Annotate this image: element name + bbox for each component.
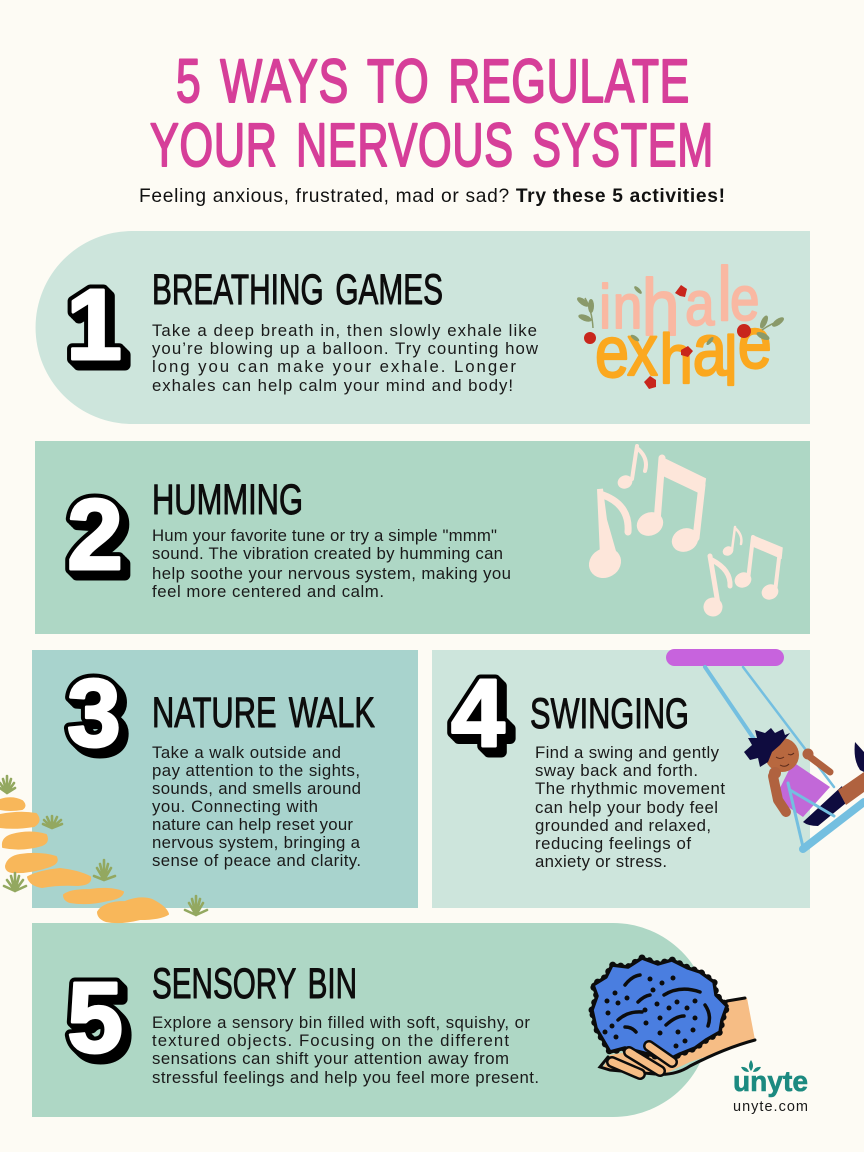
number 4: 4 (455, 664, 509, 771)
body text: you’re blowing up a balloon. Try counting how (152, 339, 539, 358)
logo: unyte (733, 1060, 808, 1115)
body text (152, 321, 539, 395)
body text: stressful feelings and help you feel more present. (152, 1068, 539, 1087)
number 1: 1 (72, 275, 128, 387)
number 2: 2 (67, 479, 123, 591)
body text: anxiety or stress. (535, 852, 667, 871)
number 4: 4 (457, 666, 511, 773)
body text: sensations can shift your attention away from (152, 1049, 509, 1068)
title: 5 WAYS TO REGULATE (176, 47, 690, 115)
body text: grounded and relaxed, (535, 816, 711, 835)
icon: hand holding sensory blob (592, 958, 755, 1076)
body text: Explore a sensory bin filled with soft, squishy, or (152, 1013, 530, 1032)
panel: 4 swinging (432, 650, 810, 908)
body text: Take a deep breath in, then slowly exhale like (152, 321, 537, 340)
body text: nervous system, bringing a (152, 833, 361, 852)
body text: reducing feelings of (535, 834, 691, 853)
icon: stepping stones and grass (0, 776, 207, 922)
number 5: 5 (67, 962, 123, 1074)
number 2: 2 (69, 481, 125, 593)
body text: sense of peace and clarity. (152, 851, 361, 870)
body text (152, 1013, 539, 1087)
panel: 2 humming (35, 441, 810, 634)
body text: you. Connecting with (152, 797, 318, 816)
number 3: 3 (69, 662, 123, 769)
panel: 1 breathing games (36, 231, 810, 424)
body text: Take a walk outside and (152, 743, 341, 762)
number 3: 3 (67, 660, 121, 767)
body text: long you can make your exhale. Longer (152, 357, 516, 376)
number 1: 1 (70, 273, 126, 385)
number 5: 5 (71, 966, 127, 1078)
body text: nature can help reset your (152, 815, 353, 834)
number 3: 3 (71, 664, 125, 771)
title (150, 47, 714, 179)
icon: inhale exhale lettering: exhale (595, 304, 772, 400)
number 4: 4 (451, 660, 505, 767)
body text: sway back and forth. (535, 761, 698, 780)
panel: 3 nature walk (32, 650, 418, 908)
logo: unyte: unyte.com (733, 1099, 808, 1115)
heading: BREATHING GAMES (152, 266, 443, 314)
number 5: 5 (69, 964, 125, 1076)
body text (152, 743, 361, 870)
icon: child on swing (666, 649, 864, 849)
icon: inhale exhale lettering: inhale (599, 251, 759, 352)
heading: HUMMING (152, 476, 303, 524)
number 3: 3 (73, 666, 127, 773)
number 5: 5 (67, 962, 123, 1074)
number 1: 1 (68, 271, 124, 383)
body text: The rhythmic movement (535, 779, 725, 798)
heading: NATURE WALK (152, 689, 375, 737)
icon: music notes (584, 446, 782, 619)
number 2: 2 (67, 479, 123, 591)
number 4: 4 (453, 662, 507, 769)
body text: textured objects. Focusing on the different (152, 1031, 509, 1050)
body text: exhales can help calm your mind and body! (152, 376, 513, 395)
body text: Hum your favorite tune or try a simple "mmm" (152, 526, 497, 545)
body text: help soothe your nervous system, making you (152, 564, 511, 583)
subtitle: Feeling anxious, frustrated, mad or sad? Try these 5 activities! (139, 186, 725, 207)
body text (152, 526, 511, 601)
body text: sounds, and smells around (152, 779, 361, 798)
number 5: 5 (73, 968, 129, 1080)
body text: feel more centered and calm. (152, 582, 384, 601)
heading: SWINGING (530, 690, 689, 738)
number 4: 4 (451, 660, 505, 767)
number 1: 1 (66, 269, 122, 381)
number 3: 3 (67, 660, 121, 767)
body text (535, 743, 725, 871)
panel: 5 sensory bin (32, 923, 710, 1117)
body text: can help your body feel (535, 798, 718, 817)
number 1: 1 (66, 269, 122, 381)
logo: unyte: unyte (733, 1066, 808, 1098)
number 2: 2 (71, 483, 127, 595)
body text: Find a swing and gently (535, 743, 720, 762)
number 2: 2 (73, 485, 129, 597)
body text: pay attention to the sights, (152, 761, 360, 780)
body text: sound. The vibration created by humming can (152, 544, 503, 563)
icon: inhale exhale lettering (576, 251, 785, 400)
heading: SENSORY BIN (152, 960, 357, 1008)
